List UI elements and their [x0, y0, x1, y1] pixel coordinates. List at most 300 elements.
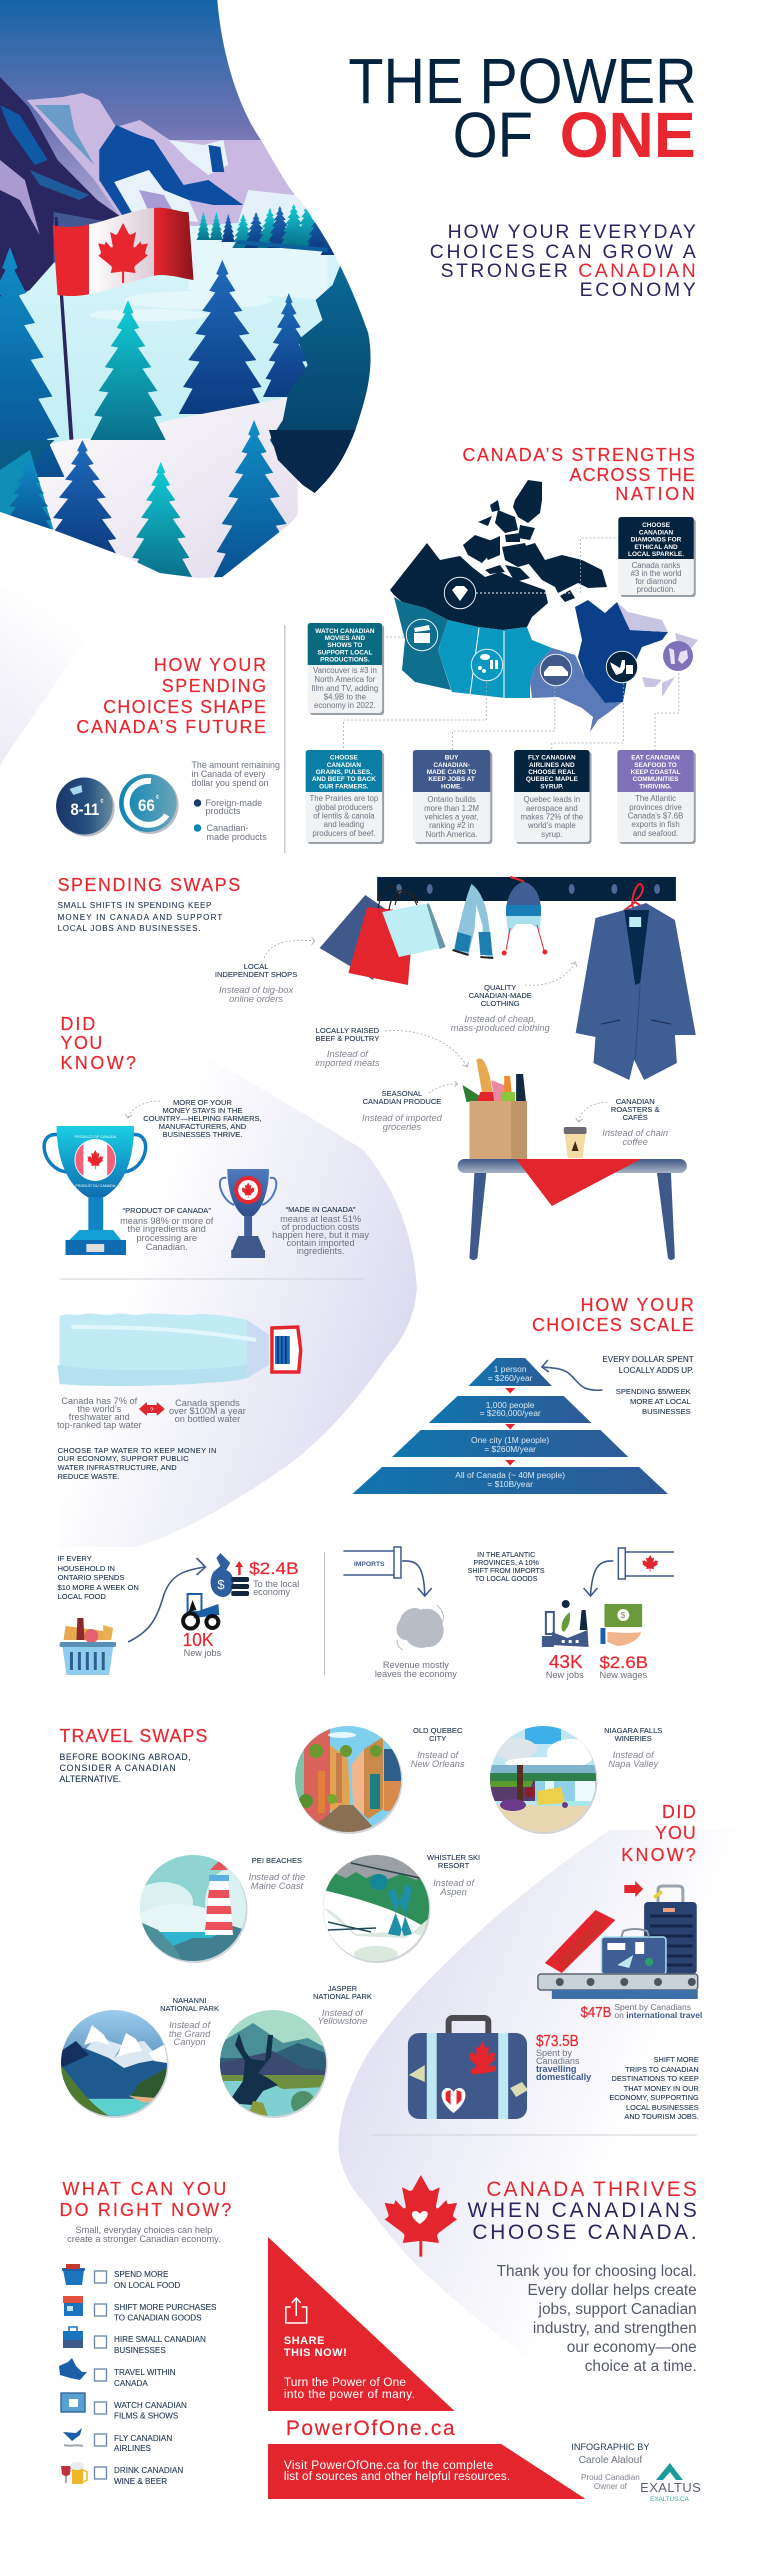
stat: 73.5B: [536, 2033, 592, 2082]
card: airlines: QUEBEC MAPLE: [526, 776, 578, 783]
card: cars: CANADIAN-: [433, 762, 470, 769]
map icon: diamond: [444, 577, 476, 609]
text: made in Canada: means at least 51%: [280, 1214, 361, 1224]
travel labels: RESORT: [438, 1861, 470, 1870]
item: spend on local food: SPEND MORE: [114, 2270, 169, 2279]
heading: spending swaps: SMALL SHIFTS IN SPENDING KEEP: [58, 901, 211, 910]
heading: how your choices scale: CHOICES SCALE: [532, 1315, 694, 1335]
item: hire small businesses: [63, 2327, 206, 2355]
text: more of your money: [125, 1098, 262, 1139]
swap label: produce: SEASONAL: [382, 1089, 422, 1098]
text: product of Canada: Canadian.: [146, 1242, 188, 1252]
tap water call to action: WATER INFRASTRUCTURE, AND: [58, 1463, 177, 1472]
heading: what can you do: create a stronger Canadian economy.: [67, 2234, 221, 2244]
text: Ontario food: IF EVERY: [58, 1554, 92, 1563]
stat circle: 66 cents: [119, 774, 179, 834]
heading: Canada thrives: CANADA THRIVES: [486, 2178, 697, 2201]
swap label: cafes: coffee: [622, 1137, 648, 1147]
visit panel: list of sources and other helpful resources.: [284, 2469, 510, 2483]
luggage on conveyor: [538, 1881, 698, 1999]
card: grains: and leading: [324, 820, 364, 829]
travel circle: Jasper: [220, 2010, 328, 2118]
swap label: produce: groceries: [383, 1122, 421, 1132]
heading: how your spending: CHOICES SHAPE: [103, 697, 266, 717]
table: [458, 1159, 687, 1260]
card: seafood: EAT CANADIAN: [631, 754, 680, 762]
pyramid notes: MORE AT LOCAL: [630, 1397, 691, 1406]
bottle facts: [57, 1396, 246, 1430]
card: airlines: syrup.: [541, 830, 562, 839]
stat: 73.5B: Spent by: [536, 2048, 572, 2058]
card: movies: Vancouver is #3 in: [313, 666, 377, 675]
icon: money in hand: [600, 1604, 642, 1646]
item: travel within Canada: [59, 2358, 176, 2388]
card: diamonds: [618, 517, 696, 597]
credits: INFOGRAPHIC BY: [571, 2442, 649, 2452]
jacket: [576, 884, 696, 1080]
heading: spending swaps: SPENDING SWAPS: [58, 875, 240, 895]
legend: Foreign-made: [205, 798, 262, 808]
share triangle: Turn the Power of One: [284, 2375, 406, 2389]
item: shift purchases: SHIFT MORE PURCHASES: [114, 2303, 217, 2312]
item: travel within Canada: TRAVEL WITHIN: [114, 2368, 176, 2377]
lake: [19, 215, 370, 456]
card: movies: SUPPORT LOCAL: [317, 649, 373, 657]
heading: how your spending: [76, 655, 266, 737]
card: grains: AND BEEF TO BACK: [312, 776, 376, 783]
stat: 43K new jobs: [546, 1652, 584, 1680]
background swoosh: spending: [0, 590, 104, 765]
flag: [53, 208, 194, 296]
card: diamonds: CANADIAN: [639, 529, 674, 537]
item: spend on local food: ON LOCAL FOOD: [114, 2281, 180, 2290]
text: made in Canada: happen here, but it may: [272, 1230, 369, 1240]
card: movies: film and TV, adding: [312, 684, 378, 693]
icon: smoke cloud: [396, 1605, 444, 1650]
travel labels: NAHANNI: [173, 1996, 207, 2005]
item: spend on local food: [62, 2264, 180, 2290]
travel labels: OLD QUEBEC: [413, 1726, 463, 1735]
credits: EXALTUS.CA: [650, 2496, 689, 2503]
heading: did you know 1: [61, 1014, 136, 1073]
card: grains: GRAINS, PULSES,: [316, 769, 372, 776]
text: product of Canada: processing are: [137, 1233, 197, 1243]
legend: in Canada of every: [192, 769, 266, 779]
map icon: plane and syrup: [606, 651, 638, 683]
credits: EXALTUS: [640, 2480, 701, 2495]
heading: how your choices scale: HOW YOUR: [581, 1295, 694, 1315]
text: atlantic provinces: TO LOCAL GOODS: [475, 1576, 538, 1583]
swap label: beef: [315, 1026, 468, 1068]
text: product of Canada: the ingredients and: [128, 1224, 206, 1234]
heading: did you know 1: KNOW?: [61, 1053, 136, 1073]
card: seafood: provinces drive: [629, 803, 682, 812]
card: cars: North America.: [426, 830, 477, 839]
pyramid: All of Canada (~ 40M people): [455, 1470, 565, 1480]
travel labels: Instead of: [322, 2008, 364, 2018]
travel labels: Instead of: [169, 2020, 211, 2030]
heading: how your spending: CANADA’S FUTURE: [76, 717, 266, 737]
share triangle: [268, 2237, 455, 2411]
visit panel: [268, 2444, 586, 2499]
pyramid: = $260/year: [488, 1373, 533, 1383]
item: fly airlines: AIRLINES: [114, 2444, 151, 2453]
card: cars: KEEP JOBS AT: [428, 776, 475, 783]
pyramid: = $10B/year: [487, 1479, 533, 1489]
stat: 73.5B: Canadians: [536, 2056, 580, 2066]
card: diamonds: CHOOSE: [642, 522, 671, 529]
text: revenue leaves: Revenue mostly: [383, 1660, 449, 1670]
text: more of your money: MORE OF YOUR: [173, 1098, 232, 1107]
bottle facts: on bottled water: [175, 1414, 240, 1424]
swap label: clothing: CLOTHING: [481, 999, 520, 1008]
card: grains: [306, 750, 384, 844]
legend: dollar you spend on: [192, 778, 269, 788]
stat: 73.5B: domestically: [536, 2072, 592, 2082]
heading: did you know 1: YOU: [61, 1033, 102, 1053]
travel circle: Niagara: [490, 1726, 598, 1834]
text: atlantic provinces: IN THE ATLANTIC: [477, 1552, 535, 1559]
card: movies: SHOWS TO: [327, 642, 362, 649]
heading: Canada's strengths: NATION: [615, 484, 695, 504]
card: grains: OUR FARMERS.: [319, 783, 369, 791]
trophy: product of Canada: PRODUIT DU CANADA: [75, 1184, 116, 1188]
background swoosh: travel did you know panel: [338, 1830, 752, 2427]
heading: travel swaps: BEFORE BOOKING ABROAD,: [60, 1752, 191, 1762]
swap label: cafes: CANADIAN: [616, 1097, 655, 1106]
text: made in Canada: “MADE IN CANADA”: [286, 1205, 356, 1214]
pyramid: [352, 1358, 668, 1494]
swap label: clothing: [451, 962, 577, 1033]
travel labels: Instead of the: [249, 1872, 305, 1882]
travel labels: WINERIES: [615, 1734, 652, 1743]
card: cars: BUY: [445, 754, 459, 762]
northern territories: [390, 480, 607, 630]
heading: did you know 2: KNOW?: [621, 1845, 696, 1865]
stat: 2.4B: To the local: [253, 1579, 299, 1589]
heading: spending swaps: MONEY IN CANADA AND SUPPORT: [58, 913, 222, 922]
pyramid notes: BUSINESSES: [642, 1407, 691, 1416]
swap label: produce: Instead of imported: [362, 1113, 443, 1123]
mountains: [27, 93, 306, 226]
text: more of your money: BUSINESSES THRIVE.: [163, 1130, 242, 1139]
card: diamonds: LOCAL SPARKLE.: [628, 551, 684, 558]
stat: 47B: Spent by Canadians: [614, 2002, 691, 2012]
text: shift more trips: DESTINATIONS TO KEEP: [612, 2074, 699, 2083]
thank-you text: Thank you for choosing local.: [497, 2263, 697, 2280]
title: OF: [453, 99, 533, 171]
card: movies: North America for: [314, 675, 376, 684]
stat circle: 66 cents: 66: [138, 796, 155, 815]
item: travel within Canada: CANADA: [114, 2379, 148, 2388]
heading: how your spending: HOW YOUR: [154, 655, 266, 675]
scarf: [453, 884, 493, 958]
card: cars: [413, 750, 492, 844]
card: seafood: KEEP COASTAL: [631, 769, 681, 776]
text: shift more trips: SHIFT MORE: [654, 2055, 699, 2064]
card: grains: global producers: [315, 803, 373, 812]
stat: 2.4B: economy: [253, 1587, 291, 1597]
card: airlines: aerospace and: [526, 804, 578, 813]
travel circle: Whistler: [323, 1855, 430, 1963]
card: cars: vehicles a year,: [425, 812, 479, 822]
card: airlines: CHOOSE REAL: [528, 769, 576, 776]
legend: made products: [206, 832, 267, 842]
swap label: clothing: CANADIAN-MADE: [469, 991, 532, 1000]
stat circle: 66 cents: ¢: [156, 795, 159, 801]
heading: did you know 2: [621, 1802, 696, 1865]
subtitle: STRONGER CANADIAN: [441, 260, 696, 282]
credits: [571, 2442, 701, 2503]
heading: what can you do: WHAT CAN YOU: [63, 2179, 226, 2199]
map icon: car: [540, 654, 572, 686]
pyramid: One city (1M people): [471, 1435, 549, 1445]
card: diamonds: ETHICAL AND: [634, 544, 678, 551]
heading: did you know 2: DID: [662, 1802, 696, 1822]
heading: travel swaps: CONSIDER A CANADIAN: [60, 1763, 176, 1773]
card: airlines: [514, 750, 592, 844]
text: made in Canada: [272, 1205, 369, 1256]
heading: spending swaps: LOCAL JOBS AND BUSINESSES.: [58, 924, 200, 933]
card: movies: MOVIES AND: [325, 635, 366, 642]
travel labels: Napa Valley: [608, 1759, 659, 1769]
thank-you text: industry, and strengthen: [533, 2320, 697, 2337]
travel labels: Instead of: [613, 1750, 655, 1760]
legend: products: [205, 806, 241, 816]
map of Canada: [390, 480, 698, 732]
checklist: [59, 2264, 217, 2486]
bottle facts: Canada spends: [175, 1398, 240, 1408]
text: made in Canada: of production costs: [282, 1222, 360, 1232]
heading: spending swaps: [58, 875, 240, 933]
card: seafood: The Atlantic: [635, 794, 676, 803]
swap label: clothing: Instead of cheap,: [464, 1014, 536, 1024]
map icon: grains: [471, 649, 503, 681]
card: diamonds: production.: [637, 585, 675, 594]
pyramid notes: EVERY DOLLAR SPENT: [602, 1355, 694, 1364]
flag pole: [55, 217, 73, 440]
travel circle: Old Quebec: [295, 1726, 402, 1835]
subtitle: HOW YOUR EVERYDAY: [448, 221, 696, 243]
credits: Carole Alalouf: [579, 2455, 642, 2466]
item: watch films: FILMS & SHOWS: [114, 2412, 179, 2420]
stat: 43K new jobs: New jobs: [546, 1670, 584, 1680]
arrow: basket to results: [128, 1558, 205, 1642]
subtitle: CHOICES CAN GROW A: [430, 241, 696, 263]
card: airlines: Quebec leads in: [524, 795, 580, 804]
card: airlines: AIRLINES AND: [529, 762, 575, 769]
Atlantic provinces: [617, 602, 698, 697]
bottle facts: over $100M a year: [169, 1406, 246, 1416]
pyramid notes: LOCALLY ADDS UP.: [619, 1366, 694, 1375]
trophy: made in Canada: [220, 1169, 276, 1258]
big suitcase: [408, 2018, 528, 2119]
travel labels: PEI BEACHES: [252, 1856, 302, 1865]
heading: Canada's strengths: [463, 445, 695, 504]
bottle facts: Canada has 7% of: [61, 1396, 138, 1406]
map icon: film: [406, 619, 438, 651]
pyramid notes: [542, 1355, 694, 1416]
heading: did you know 2: YOU: [655, 1823, 696, 1843]
card: airlines: FLY CANADIAN: [528, 754, 576, 762]
travel labels: NIAGARA FALLS: [604, 1726, 662, 1735]
card: airlines: makes 72% of the: [520, 812, 584, 822]
card: diamonds: Canada ranks: [632, 561, 680, 570]
card: grains: CHOOSE: [330, 754, 359, 762]
card: cars: MADE CARS TO: [427, 769, 476, 776]
prairies: [438, 620, 552, 698]
card: movies: [308, 623, 384, 715]
pipe: imports: IMPORTS: [354, 1561, 385, 1568]
travel labels: Yellowstone: [318, 2016, 367, 2026]
legend: Canadian-: [206, 823, 249, 833]
card: seafood: [617, 750, 696, 844]
credits: Proud Canadian: [581, 2473, 640, 2482]
text: Ontario food: LOCAL FOOD: [58, 1592, 106, 1601]
heading: Canada's strengths: CANADA’S STRENGTHS: [463, 445, 695, 465]
item: drink wine and beer: DRINK CANADIAN: [114, 2466, 183, 2475]
text: Ontario food: $10 MORE A WEEK ON: [58, 1583, 139, 1592]
swap label: beef: LOCALLY RAISED: [316, 1026, 380, 1035]
swap label: cafes: CAFÉS: [623, 1113, 648, 1122]
pyramid: = $260M/year: [484, 1444, 536, 1454]
tap water call to action: OUR ECONOMY, SUPPORT PUBLIC: [58, 1454, 189, 1463]
travel labels: New Orleans: [411, 1759, 465, 1769]
card: grains: CANADIAN: [327, 762, 361, 769]
share triangle: into the power of many.: [284, 2387, 415, 2401]
card: airlines: world’s maple: [527, 821, 576, 830]
British Columbia: [394, 597, 451, 690]
card: diamonds: DIAMONDS FOR: [631, 536, 682, 544]
lake trees: [179, 260, 266, 414]
card: cars: ranking #2 in: [429, 821, 474, 830]
item: hire small businesses: BUSINESSES: [114, 2346, 166, 2355]
heading: travel swaps: TRAVEL SWAPS: [60, 1726, 207, 1746]
thank-you text: jobs, support Canadian: [538, 2301, 697, 2318]
stat: 47B: $47B: [581, 2004, 611, 2021]
travel labels: CITY: [429, 1734, 446, 1743]
subtitle: ECONOMY: [580, 279, 696, 301]
map icon: seafood: [663, 641, 693, 671]
coat rack: [377, 877, 676, 901]
thank-you text: choice at a time.: [585, 2358, 697, 2375]
text: shift more trips: TRIPS TO CANADIAN: [625, 2065, 699, 2074]
heading: travel swaps: [60, 1726, 207, 1784]
pyramid: 1,000 people: [486, 1400, 535, 1410]
card: diamonds: for diamond: [635, 577, 677, 586]
heading: what can you do: [60, 2179, 231, 2244]
stat: 73.5B: $73.5B: [536, 2033, 579, 2050]
travel labels: Aspen: [439, 1887, 467, 1897]
travel labels: the Grand: [169, 2029, 211, 2039]
heading: how your spending: SPENDING: [162, 676, 266, 696]
title: ONE: [560, 99, 696, 171]
heading: Canada thrives: WHEN CANADIANS: [467, 2199, 697, 2222]
pyramid: = $260,000/year: [480, 1408, 541, 1418]
item: watch films: WATCH CANADIAN: [114, 2401, 187, 2410]
icon: factory: [542, 1600, 589, 1647]
swap label: local shops: Instead of big-box: [219, 985, 293, 995]
travel labels: Instead of: [417, 1750, 460, 1760]
card: grains: of lentils & canola: [313, 811, 375, 821]
legend: [192, 760, 280, 842]
stat circle: 8-11 cents: [56, 778, 115, 836]
swap label: local shops: [215, 937, 315, 1004]
text: atlantic provinces: SHIFT FROM IMPORTS: [468, 1568, 545, 1575]
text: shift more trips: AND TOURISM JOBS.: [624, 2112, 699, 2121]
icon: money bag: $: [217, 1577, 225, 1592]
travel labels: JASPER: [328, 1984, 358, 1993]
swap label: clothing: QUALITY: [484, 983, 516, 992]
subtitle: [430, 221, 696, 301]
item: drink wine and beer: [61, 2462, 183, 2486]
text: shift more trips: ECONOMY, SUPPORTING: [609, 2093, 699, 2102]
text: shift more trips: THAT MONEY IN OUR: [624, 2084, 699, 2093]
heading: Canada thrives: [467, 2178, 697, 2244]
thank-you text: our economy—one: [567, 2339, 697, 2356]
card: cars: HOME.: [441, 783, 462, 791]
big dark right tree: [270, 266, 371, 493]
trophy: product of Canada: [44, 1126, 146, 1255]
swap label: cafes: ROASTERS &: [611, 1105, 659, 1114]
heading: what can you do: DO RIGHT NOW?: [60, 2200, 231, 2220]
text: more of your money: COUNTRY—HELPING FARMERS,: [143, 1114, 262, 1123]
card: airlines: SYRUP.: [540, 783, 564, 791]
heading: travel swaps: ALTERNATIVE.: [60, 1774, 121, 1784]
travel labels: Instead of: [433, 1878, 475, 1888]
card: seafood: SEAFOOD TO: [634, 762, 677, 769]
stat: 10K new jobs: [183, 1630, 222, 1658]
travel labels: Canyon: [173, 2037, 206, 2047]
item: watch films: [61, 2393, 187, 2420]
item: fly airlines: FLY CANADIAN: [114, 2434, 172, 2443]
swap label: clothing: mass-produced clothing: [451, 1023, 551, 1033]
heading: what can you do: Small, everyday choices can help: [76, 2225, 212, 2235]
groceries bag: [463, 1058, 527, 1159]
heading: Canada thrives: CHOOSE CANADA.: [472, 2221, 697, 2244]
stat: 2.6B wages: New wages: [599, 1670, 647, 1680]
icon: share: [286, 2298, 307, 2323]
icon: tractor: [183, 1594, 219, 1628]
text: Ontario food: [58, 1554, 139, 1601]
card: movies: economy in 2022.: [314, 701, 376, 710]
stat: 2.4B: [235, 1559, 299, 1597]
travel circle: Nahanni: [61, 2010, 168, 2118]
item: fly airlines: [63, 2428, 172, 2453]
swap label: local shops: online orders: [229, 994, 283, 1004]
card: cars: more than 1.2M: [424, 804, 479, 813]
item: drink wine and beer: WINE & BEER: [114, 2477, 167, 2486]
water bottle: [58, 1314, 301, 1386]
text: more of your money: MANUFACTURERS, AND: [159, 1122, 247, 1131]
share triangle: SHARE: [284, 2335, 325, 2347]
stat circle: 8-11 cents: 8-11: [70, 800, 99, 819]
foreground trees: [0, 450, 54, 530]
text: more of your money: MONEY STAYS IN THE: [163, 1106, 242, 1115]
trophy: product of Canada: PRODUCT OF CANADA: [75, 1135, 116, 1139]
icon: money in hand: $: [621, 1611, 626, 1620]
card: movies: WATCH CANADIAN: [315, 628, 375, 635]
far forest: [196, 204, 334, 255]
Ontario: [530, 648, 622, 732]
item: hire small businesses: HIRE SMALL CANADIAN: [114, 2335, 206, 2344]
stat circle: 8-11 cents: ¢: [100, 799, 104, 805]
card: grains: The Prairies are top: [310, 794, 379, 803]
swap label: local shops: LOCAL: [244, 962, 268, 971]
text: made in Canada: contain imported: [287, 1238, 355, 1248]
website: PowerOfOne.ca: [286, 2417, 455, 2440]
travel labels: NATIONAL PARK: [313, 1992, 372, 2001]
